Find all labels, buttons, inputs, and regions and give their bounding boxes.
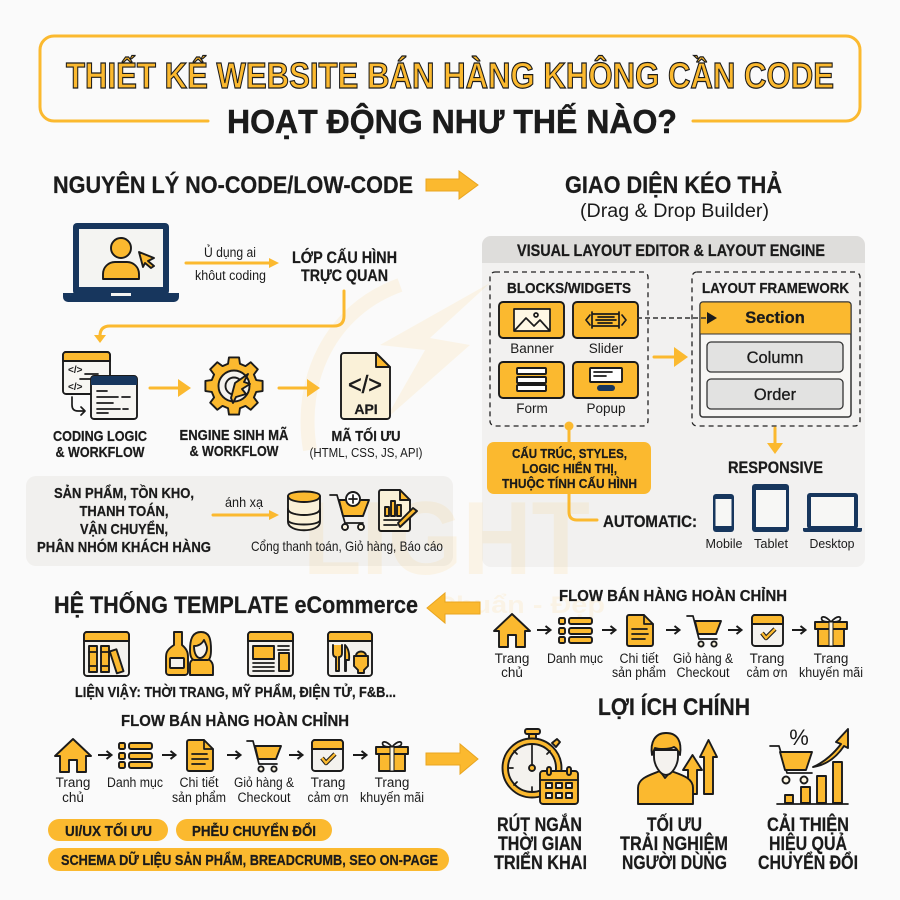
step: product detail: Chi tiết xyxy=(620,651,659,666)
label: arrow caption: Ủ dụng ai xyxy=(204,245,256,260)
label: benefit time: THỜI GIAN xyxy=(498,833,582,855)
callout: structure and styles: LOGIC HIỂN THỊ, xyxy=(522,461,617,476)
icon: tablet xyxy=(752,484,789,551)
tile: form xyxy=(499,362,564,416)
heading: sales flow left: FLOW BÁN HÀNG HOÀN CHỈNH xyxy=(121,711,349,730)
icon: cart with growth chart: % xyxy=(789,725,809,750)
heading: template system: HỆ THỐNG TEMPLATE eCommerce xyxy=(54,591,418,619)
arrow: principle to drag and drop xyxy=(426,171,478,199)
text block: data entities: THANH TOÁN, xyxy=(80,503,168,520)
watermark: LIGHT logo: Chuẩn - Đẹp xyxy=(435,592,605,619)
heading: no-code principle: NGUYÊN LÝ NO-CODE/LOW-CODE xyxy=(53,171,413,199)
step: home xyxy=(55,739,91,805)
icon: coding logic windows: </> xyxy=(68,382,83,393)
box: column xyxy=(707,342,843,372)
label: engine: ENGINE SINH MÃ xyxy=(180,426,289,444)
label: arrow caption: khôut coding xyxy=(195,268,266,283)
heading: visual configuration layer: TRỰC QUAN xyxy=(301,266,388,285)
arrow: coding logic to engine xyxy=(150,379,191,397)
panel: layout framework: Section xyxy=(745,309,805,327)
heading: drag and drop: GIAO DIỆN KÉO THẢ xyxy=(565,170,782,199)
step: category: Danh mục xyxy=(107,775,163,790)
step: promotion xyxy=(799,617,863,680)
arrow: flow back to templates xyxy=(427,593,480,623)
icon: gear engine xyxy=(205,357,263,415)
label: benefit time: RÚT NGẮN xyxy=(497,814,582,836)
step: promotion: khuyến mãi xyxy=(799,665,863,680)
icon: fashion template xyxy=(84,632,129,676)
arrow: no coding xyxy=(186,258,279,268)
step: promotion xyxy=(360,742,424,805)
panel: visual layout editor background xyxy=(482,236,865,567)
step: cart xyxy=(234,741,294,805)
label: benefit conversion xyxy=(758,814,858,874)
label: optimized code xyxy=(310,427,422,460)
panel: layout framework xyxy=(692,272,860,426)
pill: UI/UX: UI/UX TỐI ƯU xyxy=(65,822,152,840)
panel: blocks and widgets: BLOCKS/WIDGETS xyxy=(507,280,631,297)
icon: user with up arrows xyxy=(638,733,717,804)
arrow: engine to code xyxy=(279,379,320,397)
step: home: Trang xyxy=(56,775,90,790)
arrow: flow to benefits xyxy=(426,744,478,774)
tile: popup xyxy=(573,362,638,416)
watermark: LIGHT logo: LIGHT xyxy=(303,481,590,597)
pill: schema xyxy=(48,848,449,871)
step: thank you xyxy=(308,740,348,805)
icon: cosmetics xyxy=(166,632,213,675)
tile: banner xyxy=(499,302,564,356)
text block: data entities: SẢN PHẨM, TỒN KHO, xyxy=(54,484,194,502)
icon: tablet: Tablet xyxy=(754,536,788,551)
label: benefit time xyxy=(494,814,587,874)
arrow: blocks to framework xyxy=(654,347,688,367)
label: benefit experience: NGƯỜI DÙNG xyxy=(622,852,727,874)
step: category xyxy=(107,743,163,790)
watermark: LIGHT logo xyxy=(303,283,605,619)
arrow: mapping xyxy=(213,495,279,520)
callout: structure and styles: CẤU TRÚC, STYLES, xyxy=(512,446,627,461)
step: home xyxy=(494,614,530,680)
step: thank you: cảm ơn xyxy=(308,790,348,805)
heading: visual configuration layer: LỚP CẤU HÌNH xyxy=(292,248,397,267)
label: benefit conversion: CẢI THIỆN xyxy=(767,814,849,836)
tile: slider: Slider xyxy=(589,341,624,356)
label: engine xyxy=(180,426,289,460)
icon: coding logic windows: </> xyxy=(68,365,83,376)
arrow: dashed slider to section xyxy=(637,312,717,324)
step: promotion: Trang xyxy=(814,651,848,666)
arrow: framework to responsive xyxy=(767,428,783,454)
heading: drag and drop xyxy=(565,170,782,222)
box: order xyxy=(707,379,843,409)
pill: funnel xyxy=(176,819,332,841)
tile: form: Form xyxy=(516,401,548,416)
box: order: Order xyxy=(754,386,797,404)
callout: structure and styles: THUỘC TÍNH CẤU HÌNH xyxy=(502,476,637,491)
tile: popup: Popup xyxy=(586,401,626,416)
label: optimized code: MÃ TỐI ƯU xyxy=(332,427,400,445)
box: column: Column xyxy=(747,349,803,367)
label: benefit time: TRIỂN KHAI xyxy=(494,852,587,874)
step: home: chủ xyxy=(501,665,523,680)
step: category xyxy=(547,618,603,666)
heading: drag and drop: (Drag & Drop Builder) xyxy=(580,201,769,222)
panel: blocks and widgets xyxy=(490,272,648,426)
step: thank you: cảm ơn xyxy=(746,665,788,680)
label: benefit experience xyxy=(620,814,728,874)
label: mapped outputs: Cổng thanh toán, Giỏ hàng, Báo cáo xyxy=(251,538,443,554)
tile: slider xyxy=(573,302,638,356)
step: cart: Giỏ hàng & xyxy=(673,651,733,666)
title frame xyxy=(40,36,860,121)
step: cart xyxy=(673,616,733,680)
icon: electronics template xyxy=(248,632,293,676)
icon: API file xyxy=(341,353,390,419)
step: cart: Checkout xyxy=(238,790,291,805)
icon: cart with growth chart xyxy=(770,725,848,804)
step: thank you: Trang xyxy=(750,651,784,666)
step: thank you xyxy=(746,615,788,680)
label: coding logic: CODING LOGIC xyxy=(53,428,147,445)
label: coding logic xyxy=(53,428,147,461)
panel: data mapping background xyxy=(26,476,453,566)
icon: mobile: Mobile xyxy=(706,536,742,551)
label: benefit experience: TỐI ƯU xyxy=(647,814,702,836)
pill: funnel: PHỄU CHUYỂN ĐỔI xyxy=(192,822,316,840)
text block: data entities: PHÂN NHÓM KHÁCH HÀNG xyxy=(37,538,211,556)
heading: main benefits: LỢI ÍCH CHÍNH xyxy=(598,693,750,721)
panel: layout framework: LAYOUT FRAMEWORK xyxy=(702,280,849,297)
icon: report with pencil xyxy=(379,490,417,531)
label: optimized code: (HTML, CSS, JS, API) xyxy=(310,445,422,460)
step: product detail xyxy=(172,740,226,805)
text: industries: LIỆN VIẬY: THỜI TRANG, MỸ PHẨM, ĐIỆN TỬ, F&B... xyxy=(75,683,396,701)
heading: responsive: RESPONSIVE xyxy=(728,458,823,477)
arrow: mapping: ánh xạ xyxy=(225,495,263,510)
label: benefit conversion: HIỆU QUẢ xyxy=(769,833,847,855)
label: arrow caption xyxy=(195,245,266,283)
step: cart: Giỏ hàng & xyxy=(234,775,294,790)
text block: data entities xyxy=(37,484,211,556)
icon: mobile xyxy=(706,494,742,551)
text block: data entities: VẬN CHUYỂN, xyxy=(80,520,168,538)
icon: cart with plus xyxy=(330,492,369,530)
pill: schema: SCHEMA DỮ LIỆU SẢN PHẨM, BREADCRUMB, SEO ON-PAGE xyxy=(61,851,438,869)
label: coding logic: & WORKFLOW xyxy=(56,444,145,461)
title line 2: HOẠT ĐỘNG NHƯ THẾ NÀO? xyxy=(227,102,677,140)
step: product detail: sản phẩm xyxy=(612,665,666,680)
icon: API file: API xyxy=(354,401,378,417)
step: cart: Checkout xyxy=(676,665,730,680)
label: automatic: AUTOMATIC: xyxy=(603,512,697,531)
step: product detail: Chi tiết xyxy=(180,775,219,790)
step: product detail: sản phẩm xyxy=(172,790,226,805)
step: product detail xyxy=(612,615,666,680)
icon: coding logic windows xyxy=(63,352,137,419)
pill: UI/UX xyxy=(48,819,168,841)
step: promotion: Trang xyxy=(375,775,409,790)
icon: desktop xyxy=(803,493,862,551)
arrow: connector to coding logic xyxy=(94,291,344,343)
step: category: Danh mục xyxy=(547,651,603,666)
step: promotion: khuyến mãi xyxy=(360,790,424,805)
heading: layout editor: VISUAL LAYOUT EDITOR & LAYOUT ENGINE xyxy=(517,241,825,260)
flow: right sales flow xyxy=(494,614,863,680)
heading: sales flow right: FLOW BÁN HÀNG HOÀN CHỈNH xyxy=(559,586,787,605)
icon: database xyxy=(288,492,320,530)
icon: desktop: Desktop xyxy=(810,536,854,551)
step: home: chủ xyxy=(62,790,84,805)
label: benefit experience: TRẢI NGHIỆM xyxy=(620,833,728,855)
icon: food template xyxy=(328,632,372,676)
icon: laptop with user xyxy=(63,223,179,302)
tile: banner: Banner xyxy=(510,341,554,356)
label: benefit conversion: CHUYỂN ĐỔI xyxy=(758,852,858,874)
step: home: Trang xyxy=(495,651,529,666)
step: thank you: Trang xyxy=(311,775,345,790)
heading: visual configuration layer xyxy=(292,248,397,285)
label: engine: & WORKFLOW xyxy=(190,443,279,460)
icon: API file: </> xyxy=(348,371,382,399)
flow: left sales flow xyxy=(55,739,424,805)
icon: stopwatch with calendar xyxy=(502,729,578,804)
callout: structure and styles xyxy=(487,422,651,520)
